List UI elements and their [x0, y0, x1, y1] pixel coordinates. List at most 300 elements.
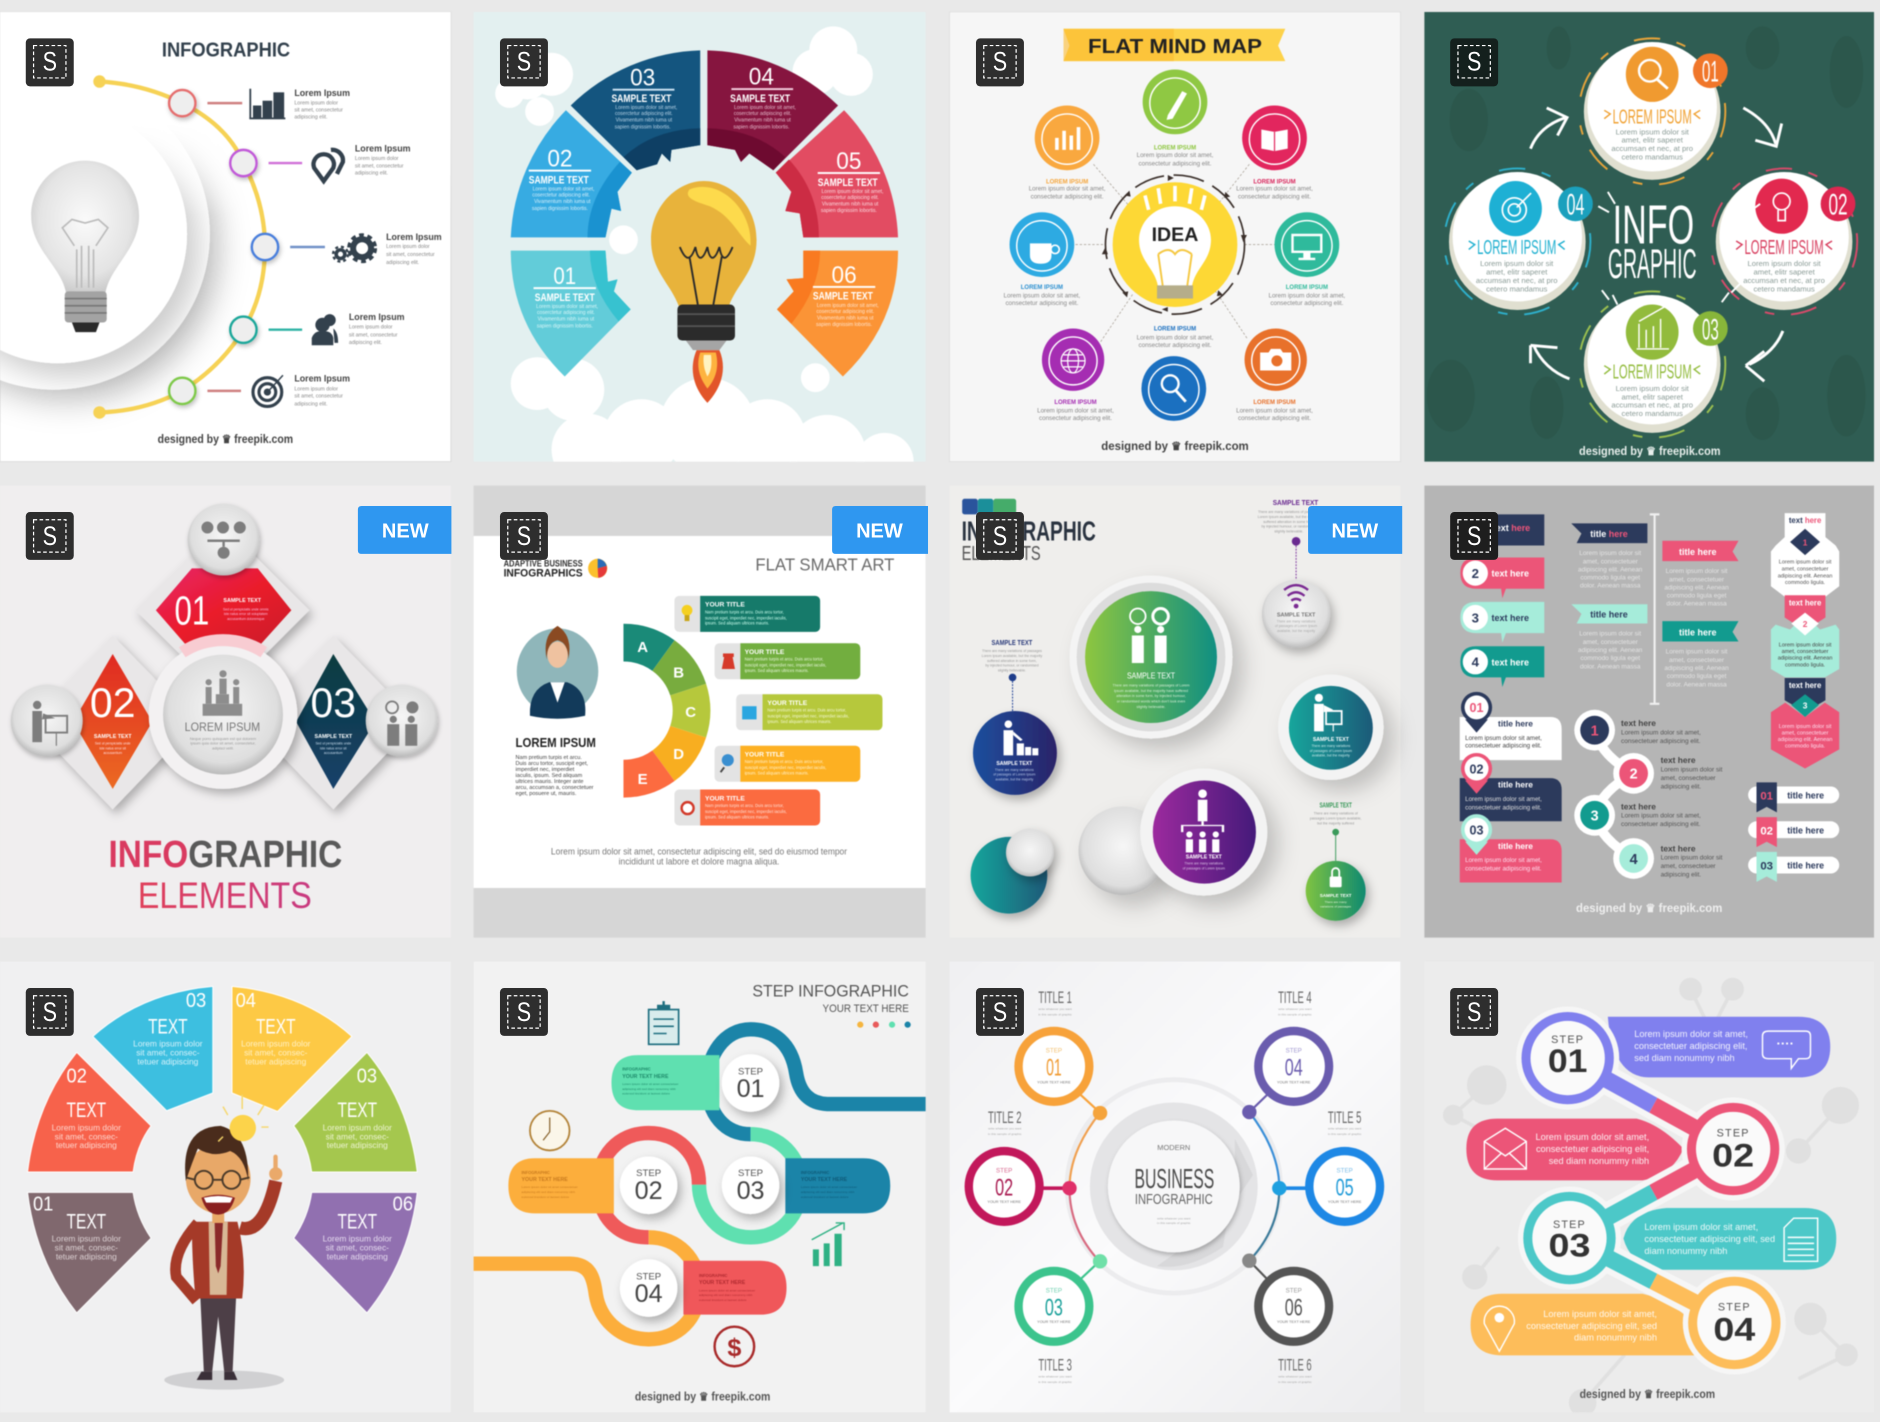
segment 06 purple: 06 [393, 1193, 413, 1215]
text: lorem ipsum: ultrices mauris. Integer ante [516, 779, 583, 785]
chain labels: text here [1661, 843, 1696, 853]
segment 03 blue [93, 986, 213, 1111]
speech tag 3: text here [1492, 613, 1529, 623]
left label and pin: SAMPLE TEXT [992, 638, 1033, 647]
icon circle: globe (purple): Lorem ipsum dolor sit amet, [1037, 407, 1114, 414]
card C: suscipit eget, imperdiet nec, imperdiet iaculis, [767, 714, 849, 719]
segment 02 red: Lorem ipsum dolor [52, 1123, 121, 1133]
segment 01 mauve: tetuer adipiscing [56, 1252, 117, 1262]
ribbons column 3: dolor. Aenean massa [1666, 681, 1727, 688]
segment 05: 05 [836, 148, 861, 175]
title tag 01 [1748, 782, 1839, 812]
S badge row 3 col 2 [500, 988, 548, 1036]
chain labels: Lorem ipsum dolor sit [1661, 767, 1723, 774]
segment 06: sapien dignissim lobortis. [816, 322, 872, 328]
segment 01 mauve: 01 [33, 1193, 53, 1215]
icon circle: workers [366, 685, 438, 757]
S badge row 1 col 4: S [1467, 47, 1481, 77]
step 01 [1522, 1012, 1614, 1104]
segment 03 blue: sit amet, consec- [136, 1048, 200, 1058]
segment 03: SAMPLE TEXT [611, 93, 671, 105]
teal circle [1278, 675, 1384, 780]
large green circle: SAMPLE TEXT [1127, 671, 1175, 681]
chalkboard texture [1427, 26, 1866, 440]
segment 04: 04 [749, 64, 774, 91]
chain labels: Lorem ipsum dolor sit amet, [1621, 813, 1701, 820]
left diamond: Sed ut perspiciatis unde [95, 742, 131, 746]
step 02 [1687, 1103, 1779, 1195]
NEW badge panel 7 [1308, 506, 1402, 554]
right diamond: iste natus error sit [320, 746, 347, 750]
step card 3 pink: text here [1789, 681, 1822, 690]
S badge row 1 col 1 [26, 38, 74, 86]
icon circle: cup (blue): Lorem ipsum dolor sit amet, [1004, 292, 1081, 299]
heading [962, 516, 1096, 565]
ribbons column 3: amet, consectetuer [1669, 657, 1725, 664]
card 03 chart: accumsan et nec, at pro [1611, 401, 1693, 410]
centre circle: Neque porro quisquam est qui dolorem [190, 737, 256, 741]
step chain [1574, 710, 1654, 879]
chain labels: text here [1621, 718, 1656, 728]
NEW badges [358, 506, 1402, 554]
panel: lightbulb rocket radial infographic [494, 26, 914, 462]
pill: step 02: INFOGRAPHIC [522, 1170, 550, 1175]
icon circle: search centre (blue): Lorem ipsum dolor sit amet, [1137, 334, 1214, 341]
card 01 search: Lorem ipsum dolor sit [1616, 127, 1690, 136]
heading [752, 981, 911, 1028]
step card 1 white: adipiscing elit. Aenean [1778, 573, 1832, 579]
top-right label and pin: by injected humour, or randomised [1261, 525, 1316, 529]
small wifi circle: of passages of Lorem Ipsum [1275, 624, 1317, 628]
navy circle: available, but the majority [995, 778, 1034, 782]
pill: step 01 [611, 1055, 719, 1110]
icon circle: pencil (green): consectetur adipiscing elit. [1139, 160, 1212, 167]
left label and pin: slightly believable. [998, 668, 1026, 672]
title tag 03: 03 [1760, 860, 1773, 872]
icon circle: cup (blue): consectetur adipiscing elit. [1005, 300, 1079, 307]
pill: step 01: Lorem ipsum dolor sit amet consectetuer [622, 1082, 678, 1086]
card 01 search: amet, elitr saperet [1622, 136, 1684, 145]
step circle 01: STEP [738, 1066, 763, 1077]
card 04 target [1444, 168, 1593, 315]
right diamond: accusantium [324, 751, 343, 755]
icon: dollar: $ [727, 1334, 741, 1362]
semi-ring chart: E [638, 771, 648, 788]
card 03 chart: amet, elitr saperet [1622, 392, 1684, 401]
top-right label and pin: SAMPLE TEXT [1273, 498, 1319, 507]
text: lorem ipsum: arcu, accumsan a, consectetuer [516, 785, 594, 791]
text block 2: Lorem ipsum dolor [355, 156, 399, 162]
text block 1: adipiscing elit. [294, 115, 327, 121]
text block 2: sit amet, consectetur [355, 163, 404, 169]
step card 1 white: Lorem ipsum dolor sit [1779, 560, 1832, 566]
chalk heading [1598, 192, 1760, 305]
node title captions: write whatever you want [988, 1126, 1022, 1130]
centre idea hub: IDEA [1152, 224, 1198, 246]
card E: suscipit eget, imperdiet nec, imperdiet iaculis, [705, 809, 787, 814]
right diamond: SAMPLE TEXT [314, 734, 353, 740]
ribbons column 2: commodo ligula eget [1580, 655, 1640, 662]
card D: YOUR TITLE [745, 752, 785, 759]
large green circle: or randomised words which don't look even [1117, 700, 1185, 704]
segment 04 yellow: Lorem ipsum dolor [241, 1039, 311, 1049]
ribbons column 3: commodo ligula eget [1667, 593, 1727, 600]
node titles: TITLE 1 [1038, 988, 1072, 1007]
crescent shadows behind bulb [0, 12, 451, 390]
step node 02 [969, 1151, 1040, 1222]
ribbons column 2: title here [1590, 609, 1628, 619]
segment 03 [571, 50, 700, 170]
right diamond: Sed ut perspiciatis unde [315, 742, 351, 746]
card 03 chart: LOREM IPSUM [1613, 361, 1692, 383]
pill: step 04: euismod tincidunt ut laoreet dolore [699, 1298, 747, 1302]
step card 2 mint: Lorem ipsum dolor sit [1779, 642, 1832, 648]
step node 03: YOUR TEXT HERE [1037, 1320, 1071, 1324]
step node 05: YOUR TEXT HERE [1328, 1200, 1362, 1204]
S badge row 1 col 2 [500, 38, 548, 86]
purple circle: of passages of Lorem Ipsum [1183, 866, 1225, 870]
card 04 target: LOREM IPSUM [1477, 237, 1556, 259]
step 01: 01 [1548, 1043, 1587, 1079]
speech tag 3: 3 [1472, 610, 1479, 625]
panel: lightbulb timeline infographic [0, 12, 451, 462]
pill 01 purple: sed diam nonummy nibh [1634, 1053, 1735, 1063]
segment 06: 06 [831, 262, 857, 289]
segment 04 yellow [232, 986, 352, 1111]
S badge row 2 col 2 [500, 512, 548, 560]
pill 04 yellow [1471, 1294, 1695, 1355]
dashed connectors [1075, 164, 1276, 342]
chalk heading: INFO [1613, 193, 1694, 255]
segment 03 green: sit amet, consec- [326, 1132, 389, 1142]
pill 01 purple: ···· [1777, 1036, 1794, 1051]
segment 03 blue: Lorem ipsum dolor [133, 1039, 203, 1049]
teal circle: of passages of Lorem Ipsum [1310, 749, 1352, 753]
icon: growth chart [812, 1223, 844, 1266]
bottom-right label and pin: SAMPLE TEXT [1319, 801, 1352, 810]
pill 03 teal [1623, 1208, 1836, 1270]
panel: circles infographic elements [950, 486, 1400, 938]
node titles [988, 988, 1361, 1374]
callout 03: 03 [1470, 823, 1484, 837]
pill 03 teal: consectetuer adipiscing elit, sed [1644, 1234, 1775, 1244]
ribbons column 3: dolor. Aenean massa [1666, 600, 1727, 607]
icon circle: chart (orange) [1029, 106, 1106, 200]
centre disc: write whatever you want [1157, 1216, 1191, 1220]
card A: suscipit eget, imperdiet nec, imperdiet iaculis, [705, 615, 787, 620]
yellow curved timeline [93, 75, 265, 419]
NEW badge panel 6 [832, 506, 928, 554]
icon circle: pencil (green): LOREM IPSUM [1154, 145, 1196, 151]
chain labels: consectetuer adipiscing elit. [1621, 738, 1701, 745]
credit: designed by ♛ freepik.com [1580, 1389, 1715, 1401]
semi-ring chart: C [685, 704, 696, 721]
step chain: 2 [1630, 767, 1638, 783]
S badge row 3 col 4: S [1467, 997, 1481, 1027]
step node 06: 06 [1285, 1294, 1303, 1321]
left diamond: 02 [90, 679, 135, 726]
card 01 search: LOREM IPSUM [1613, 107, 1692, 129]
pill 01 purple [1608, 1017, 1830, 1077]
card 04 target: 04 [1566, 189, 1584, 222]
segment 04 [707, 50, 838, 170]
segment 03: coserctetur adipiscing elit. [615, 111, 673, 117]
icon circle: pencil (green): Lorem ipsum dolor sit amet, [1137, 152, 1214, 159]
text: lorem ipsum: LOREM IPSUM [516, 736, 596, 750]
pill: step 02: euismod tincidunt ut laoreet dolore [522, 1195, 569, 1199]
node title captions: write whatever you want [1038, 1007, 1072, 1011]
left label and pin: There are many variations of passages [982, 649, 1042, 653]
segment 03 green: Lorem ipsum dolor [323, 1123, 392, 1133]
step node 01: 01 [1046, 1054, 1062, 1081]
segment 06 purple: tetuer adipiscing [327, 1252, 388, 1262]
text: lorem ipsum: iaculis, ipsum. Sed aliquam [516, 773, 583, 779]
segment 02 red: sit amet, consec- [55, 1132, 118, 1142]
pill 03 teal: Lorem ipsum dolor sit amet, [1644, 1222, 1758, 1232]
large green circle: There are many variations of passages of Lorem [1113, 683, 1190, 687]
pill 02 pink [1466, 1119, 1683, 1180]
text block 4: sit amet, consectetur [349, 332, 398, 338]
logo heading: ADAPTIVE BUSINESS [504, 559, 583, 570]
step card 1 white: commodo ligula. [1785, 580, 1826, 586]
text block 1: sit amet, consectetur [294, 108, 343, 114]
card E [674, 790, 820, 826]
pill: step 03: adipiscing elit sed diam nonummy nibh [801, 1190, 855, 1194]
step circle 04: STEP [636, 1271, 661, 1282]
speech tag 1 [1460, 514, 1544, 554]
step node 04: STEP [1286, 1048, 1302, 1055]
segment 01: coserctetur adipiscing elit. [537, 310, 595, 316]
segment 01 mauve: TEXT [67, 1208, 106, 1233]
pill: step 03: euismod tincidunt ut laoreet dolore [801, 1195, 849, 1199]
teal circle: SAMPLE TEXT [1313, 737, 1350, 743]
icon circle: chart (orange): Lorem ipsum dolor sit amet, [1029, 186, 1106, 193]
text block 1 [294, 88, 350, 121]
segment 03 blue: tetuer adipiscing [137, 1057, 199, 1067]
step card 2 mint [1771, 595, 1839, 677]
callout 01: 01 [1470, 701, 1484, 715]
text block 5 [294, 373, 350, 407]
pill: step 02: Lorem ipsum dolor sit amet consectetuer [522, 1185, 578, 1189]
S badge row 3 col 1 [26, 988, 74, 1036]
text: lorem ipsum: eget, posuere ut, mauris. [516, 791, 577, 797]
small wifi circle: There are many variations [1277, 619, 1316, 623]
NEW badge panel 5 [358, 506, 451, 554]
pill 01 purple: consectetuer adipiscing elit, [1634, 1041, 1747, 1051]
ribbons column 3: amet, consectetuer [1669, 577, 1725, 584]
timeline nodes [169, 90, 278, 404]
card 02 bulb: 02 [1828, 189, 1848, 222]
card 04 target: accumsan et nec, at pro [1476, 276, 1558, 285]
node title captions: in this sample of graphic [1038, 1380, 1072, 1384]
segment 05: Lorem ipsum dolor sit amet, [822, 189, 883, 195]
card B: Nam pretium turpis et arcu. Duis arcu tortor, [745, 657, 823, 662]
heading: STEP INFOGRAPHIC [752, 981, 909, 1000]
text block 3: adipiscing elit. [386, 260, 419, 266]
segment 03 green: 03 [357, 1066, 377, 1088]
ribbons column 2: adipiscing elit. Aenean [1578, 566, 1643, 573]
centre circle: adipisci velit. [212, 746, 234, 750]
centre disc: MODERN [1157, 1143, 1190, 1152]
segment 04 yellow: sit amet, consec- [244, 1048, 308, 1058]
green small lock circle [1306, 861, 1366, 921]
semi-ring chart: A [637, 639, 648, 656]
text block 3: sit amet, consectetur [386, 252, 435, 258]
ribbons column 2: adipiscing elit. Aenean [1578, 647, 1643, 654]
left diamond: iste natus error sit [99, 746, 126, 750]
step card 1 white: text here [1789, 516, 1822, 525]
vertical divider [1650, 514, 1659, 704]
text block 2 [355, 144, 411, 176]
text block 4: Lorem Ipsum [349, 312, 405, 322]
centre disc: BUSINESS [1135, 1163, 1214, 1194]
title tag 02: 02 [1760, 825, 1773, 837]
segment 02: SAMPLE TEXT [529, 174, 589, 186]
step node 05: STEP [1337, 1168, 1353, 1175]
pill: step 02: YOUR TEXT HERE [522, 1177, 568, 1183]
segment 01: Lorem ipsum dolor sit amet, [536, 304, 598, 310]
S badge row 3 col 3: S [993, 997, 1007, 1027]
step card 3 pink: adipiscing elit. Aenean [1778, 737, 1832, 743]
node title captions: write whatever you want [1038, 1375, 1072, 1379]
step 02: STEP [1717, 1128, 1750, 1140]
small wifi circle: SAMPLE TEXT [1277, 612, 1316, 618]
step chain: 4 [1630, 852, 1638, 868]
segment 05: Vivamentum nibh iuma ut [822, 202, 879, 208]
semi-ring chart: D [673, 746, 684, 763]
segment 05 [776, 110, 898, 237]
chain labels: adipiscing elit. [1661, 871, 1701, 878]
large green circle: alteration in some form, by injected humour, [1116, 694, 1186, 698]
credit: designed by ♛ freepik.com [635, 1391, 770, 1403]
segment 04: coserctetur adipiscing elit. [734, 111, 791, 117]
logo heading: INFOGRAPHICS [504, 568, 583, 580]
panel: grey elements collection [1424, 486, 1874, 938]
pill: step 04: Lorem ipsum dolor sit amet consectetuer [699, 1288, 755, 1292]
ribbons column 3: title here [1679, 627, 1716, 637]
callout 02: 02 [1470, 762, 1484, 776]
small wifi circle [1262, 580, 1330, 648]
green small lock circle: variations of passages [1320, 905, 1352, 909]
node titles: TITLE 5 [1328, 1108, 1361, 1127]
step node 04 [1258, 1031, 1329, 1102]
node title captions: write whatever you want [1328, 1126, 1361, 1130]
icon circle: pencil (green) [1137, 70, 1214, 167]
S badges [26, 38, 1498, 1036]
text block 5: sit amet, consectetur [294, 393, 343, 399]
S badge row 3 col 3 [976, 988, 1024, 1036]
ribbons column 3: adipiscing elit. Aenean [1664, 665, 1729, 672]
ribbons column 2: amet, consectetuer [1583, 639, 1639, 646]
icon circle: monitor (teal) [1269, 212, 1346, 307]
node titles: TITLE 2 [988, 1108, 1022, 1127]
segment 06: Lorem ipsum dolor sit amet, [817, 303, 879, 309]
text block 2: Lorem Ipsum [355, 144, 411, 154]
icon: target [253, 375, 283, 406]
step node 06: YOUR TEXT HERE [1277, 1320, 1311, 1324]
ribbons column 2: amet, consectetuer [1583, 559, 1639, 566]
node title captions: in this sample of graphic [1278, 1013, 1312, 1017]
step chain: 3 [1591, 809, 1599, 825]
card 03 chart: Lorem ipsum dolor sit [1616, 384, 1690, 393]
segment 06 purple: sit amet, consec- [326, 1243, 389, 1253]
card 03 chart [1579, 291, 1728, 438]
green small lock circle: SAMPLE TEXT [1320, 893, 1352, 898]
centre disc: INFOGRAPHIC [1135, 1192, 1213, 1208]
segment 06: SAMPLE TEXT [813, 291, 873, 303]
chain labels: text here [1621, 801, 1656, 811]
heading: ELEMENTS [962, 543, 1041, 565]
icon circle: search centre (blue): consectetur adipiscing elit. [1139, 342, 1212, 349]
icon circle: camera (orange): consectetur adipiscing elit. [1238, 415, 1311, 422]
card D: Nam pretium turpis et arcu. Duis arcu tortor, [745, 759, 823, 764]
card E: YOUR TITLE [705, 795, 745, 802]
segment 03: 03 [630, 65, 655, 92]
icon circle: globe (purple): consectetur adipiscing elit. [1039, 415, 1112, 422]
step node 01: STEP [1046, 1048, 1062, 1055]
segment 04: SAMPLE TEXT [730, 93, 790, 105]
step card 3 pink: commodo ligula. [1785, 744, 1826, 750]
speech tag 1: text here [1493, 523, 1530, 533]
icon circle: cup (blue) [1004, 212, 1081, 307]
segment 02 [511, 110, 632, 237]
card 02 bulb [1711, 168, 1857, 315]
bottom-right label and pin: There are many variations of [1314, 812, 1358, 816]
card 01 search [1579, 38, 1728, 185]
left label and pin: Lorem Ipsum available, but the majority [982, 654, 1042, 658]
segment 03 green: TEXT [338, 1097, 377, 1122]
step card 1 white: 1 [1803, 538, 1808, 548]
icon: clock [530, 1111, 570, 1150]
step card 2 mint: amet, consectetuer [1782, 649, 1829, 655]
callout 01 [1460, 692, 1562, 760]
green small lock circle: There are many [1325, 900, 1347, 904]
segment 06 [777, 251, 898, 376]
chain labels: amet, consectetuer [1661, 863, 1716, 870]
card A: ipsum. Sed aliquam ultrices mauris. [705, 621, 769, 626]
teal blank circle with white disc [971, 828, 1054, 914]
text: lorem ipsum: Nam pretium turpis et arcu. [516, 755, 582, 761]
pill: step 04: INFOGRAPHIC [699, 1273, 728, 1278]
panel: infographic elements diamonds [0, 486, 451, 938]
segment 01: sapien dignissim lobortis. [537, 323, 593, 329]
segment 02: coserctetur adipiscing elit. [532, 193, 590, 199]
icon circle: camera (orange): LOREM IPSUM [1253, 400, 1296, 406]
segment 02: Vivamentum nibh iuma ut [534, 199, 591, 205]
caption [551, 846, 847, 866]
icon circle: team [188, 504, 260, 576]
segment 03: Vivamentum nibh iuma ut [616, 118, 673, 124]
teal circle: available, but the majority [1312, 754, 1350, 758]
node title captions [988, 1007, 1362, 1384]
step node 03: STEP [1046, 1288, 1062, 1295]
icon: glass lightbulb [31, 161, 139, 332]
text block 4: Lorem ipsum dolor [349, 325, 393, 331]
top diamond: iste natus error sit voluptatem [224, 612, 268, 616]
ribbons column 3 [1662, 541, 1739, 688]
ribbons column 2: Lorem ipsum dolor sit [1579, 630, 1641, 637]
card E: Nam pretium turpis et arcu. Duis arcu tortor, [705, 803, 784, 808]
card 01 search: 01 [1702, 56, 1719, 89]
connector lines [1043, 1093, 1307, 1281]
speech tag 2 [1460, 558, 1544, 598]
icon circle: cup (blue): LOREM IPSUM [1021, 285, 1063, 291]
heading: YOUR TEXT HERE [822, 1003, 909, 1015]
navy circle: SAMPLE TEXT [996, 761, 1033, 767]
centre idea hub [1102, 175, 1247, 314]
icon circle: chart (orange): consectetur adipiscing elit. [1031, 193, 1104, 200]
ribbons column 3: commodo ligula eget [1667, 673, 1727, 680]
